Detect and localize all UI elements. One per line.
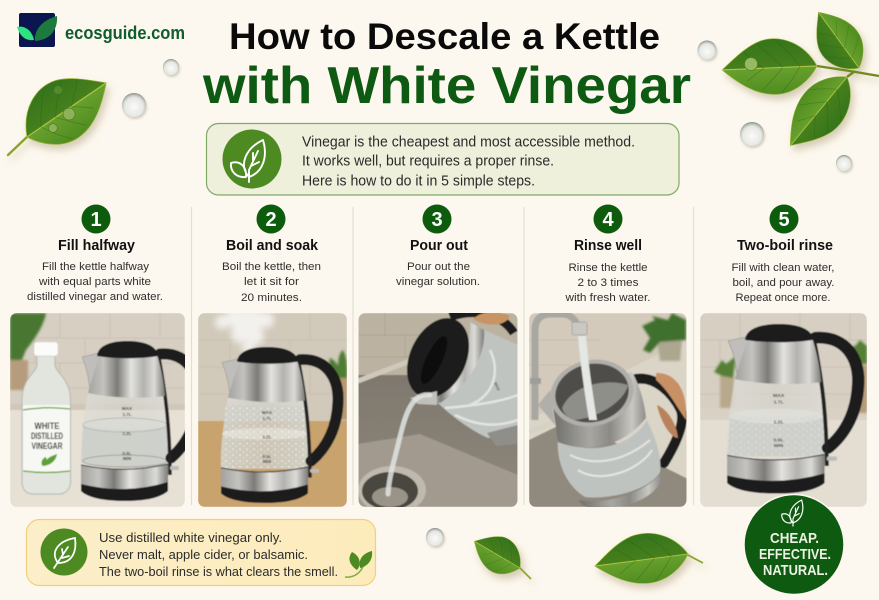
step 5: heading and text: 5: [778, 209, 790, 231]
kettle: MAX: [122, 406, 132, 411]
badge: cheap, effective, natural: NATURAL.: [763, 562, 828, 579]
step 1: heading and text: [27, 204, 163, 303]
step 2: heading and text: 2: [265, 209, 277, 231]
step 1: heading and text: distilled vinegar and water.: [27, 291, 163, 303]
photo 2: boiling kettle with steam: [198, 308, 347, 507]
logo: ecosguide.com: ecosguide.com: [65, 23, 185, 43]
callout text: Use distilled white vinegar only.: [99, 530, 282, 545]
water droplets: [122, 40, 852, 546]
step 4: heading and text: Rinse the kettle: [568, 262, 648, 274]
decorative branch of leaves top right: [721, 0, 879, 161]
intro text: It works well, but requires a proper rinse.: [302, 154, 554, 170]
column dividers: [192, 207, 694, 505]
icon: leaf badge: [222, 130, 282, 188]
plants: [714, 340, 867, 413]
kettle: 1.2L: [122, 431, 132, 436]
decorative leaf top left: [8, 56, 123, 161]
badge: cheap, effective, natural: EFFECTIVE.: [759, 546, 831, 563]
sink drain: [358, 466, 426, 507]
decorative leaf bottom centre: [466, 525, 531, 583]
photo 4: rinsing under the tap: [529, 313, 690, 509]
plant: [10, 313, 46, 390]
step 2: heading and text: Boil and soak: [226, 238, 319, 254]
step 1: heading and text: with equal parts white: [38, 276, 151, 288]
step 5: heading and text: Repeat once more.: [736, 292, 830, 304]
photo 3: pouring out over the sink: [358, 308, 518, 514]
vinegar bottle: [22, 342, 70, 494]
step 3: heading and text: 3: [431, 209, 443, 231]
vinegar bottle: DISTILLED: [31, 431, 63, 441]
vinegar bottle: WHITE: [34, 421, 60, 432]
step 5: heading and text: Fill with clean water,: [732, 262, 834, 274]
callout text: The two-boil rinse is what clears the smell.: [99, 564, 338, 579]
vinegar bottle: VINEGAR: [32, 441, 63, 452]
step 5: heading and text: [732, 204, 834, 304]
decorative leaf bottom right: [591, 528, 703, 590]
logo: ecosguide.com: [17, 13, 185, 47]
photo 5: clean kettle: [700, 313, 867, 507]
kettle: 0.5L: [122, 451, 132, 456]
kettle under tap: [538, 352, 686, 509]
kettle: 0.5L: [774, 438, 784, 444]
step 3: heading and text: [396, 204, 480, 288]
step 1: heading and text: 1: [90, 209, 102, 231]
step 1: heading and text: Fill the kettle halfway: [42, 261, 150, 273]
kettle: 1.7L: [262, 416, 272, 421]
intro panel: [206, 124, 679, 195]
kettle: 1.7L: [122, 412, 132, 417]
water stream: [388, 395, 430, 494]
step 3: heading and text: Pour out: [410, 238, 468, 254]
badge: cheap, effective, natural: [744, 494, 844, 594]
icon: leaf: [40, 528, 88, 576]
title: How to Descale a Kettle: [229, 15, 660, 57]
callout: vinegar tip: [26, 520, 376, 586]
step 4: heading and text: [564, 204, 650, 304]
intro text: Vinegar is the cheapest and most accessible method.: [302, 134, 635, 150]
icon: sprig: [345, 551, 372, 577]
kettle: 0.5L: [262, 454, 272, 459]
intro text: Here is how to do it in 5 simple steps.: [302, 174, 535, 190]
kettle: 1.2L: [774, 420, 784, 426]
kettle: MIN: [263, 459, 271, 464]
steam: [215, 308, 274, 354]
plant: [329, 350, 347, 420]
step 2: heading and text: let it sit for: [244, 276, 299, 288]
badge: cheap, effective, natural: CHEAP.: [770, 530, 819, 547]
title: with White Vinegar: [202, 57, 691, 115]
kettle: 1.2L: [262, 435, 272, 440]
photo 3: pouring out over the sink: MAX: [493, 381, 502, 392]
callout text: [99, 530, 338, 579]
step 2: heading and text: Boil the kettle, then: [222, 261, 321, 273]
plant and pot: [642, 313, 686, 361]
step 4: heading and text: 4: [602, 209, 614, 231]
title: [202, 15, 691, 115]
tilted kettle: [406, 313, 518, 446]
step 4: heading and text: with fresh water.: [564, 292, 650, 304]
intro text: [302, 134, 635, 190]
water stream: [578, 336, 597, 420]
kettle: MAX: [262, 410, 272, 415]
photo 1: vinegar bottle and kettle: [10, 313, 198, 507]
kettle: [221, 347, 338, 503]
step 2: heading and text: 20 minutes.: [241, 292, 302, 304]
faucet: [530, 314, 587, 420]
step 1: heading and text: Fill halfway: [58, 238, 135, 254]
step 5: heading and text: Two-boil rinse: [737, 238, 833, 254]
kettle: MIN: [123, 456, 131, 461]
step 4: heading and text: Rinse well: [574, 238, 642, 254]
step 3: heading and text: Pour out the: [407, 261, 470, 273]
step 5: heading and text: boil, and pour away.: [732, 277, 834, 289]
kettle: 1.7L: [774, 400, 784, 405]
step 3: heading and text: vinegar solution.: [396, 276, 480, 288]
kettle: MIN: [774, 443, 784, 449]
step 2: heading and text: [222, 204, 321, 304]
step 4: heading and text: 2 to 3 times: [578, 277, 639, 289]
kettle: MAX: [773, 393, 785, 399]
kettle: [81, 341, 198, 501]
kettle: [727, 324, 858, 494]
callout text: Never malt, apple cider, or balsamic.: [99, 547, 308, 562]
